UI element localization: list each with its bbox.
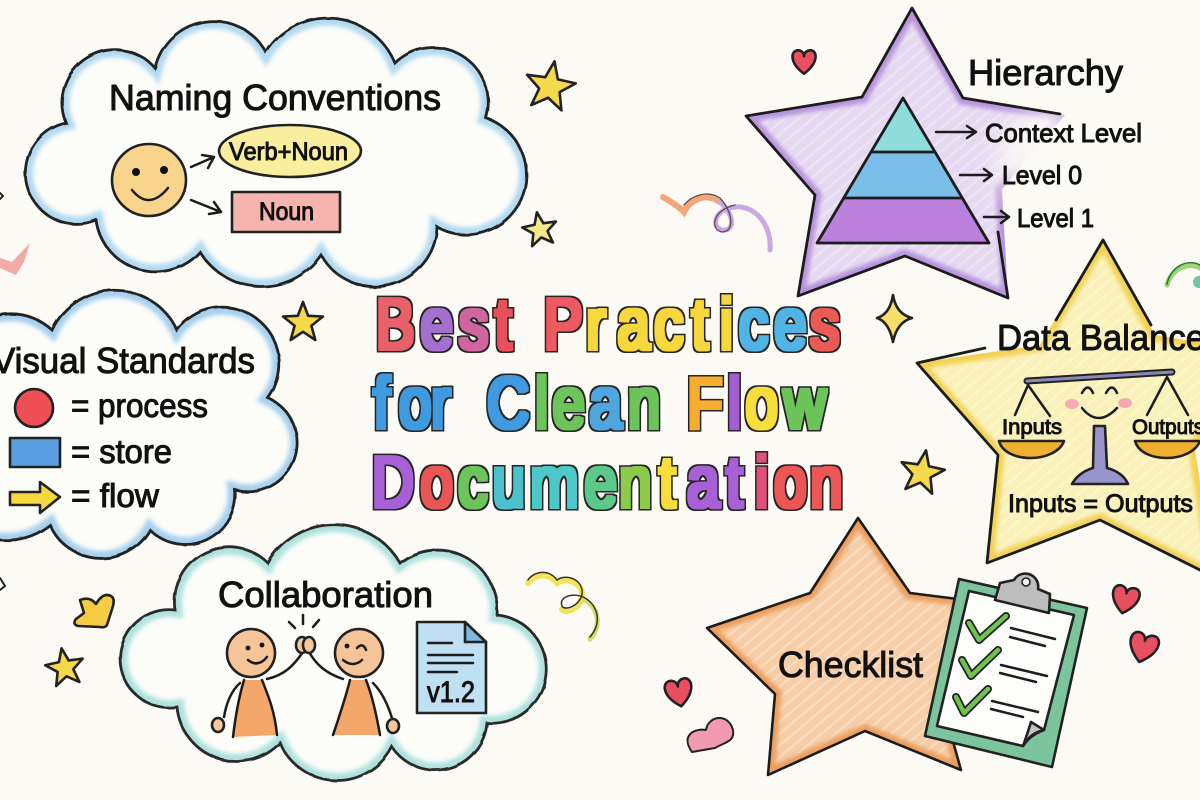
title: best practices for clean flow documentation: s <box>810 284 839 364</box>
title: best practices for clean flow documentation: n <box>810 442 842 522</box>
legend: process text: = process <box>71 387 208 424</box>
title: best practices for clean flow documentation: l <box>728 363 741 443</box>
title: best practices for clean flow documentation: t <box>692 284 708 364</box>
title: best practices for clean flow documentation: t <box>659 442 675 522</box>
title: best practices for clean flow documentation: B <box>376 284 414 364</box>
title: best practices for clean flow documentation: n <box>619 442 651 522</box>
icon: high five hands <box>289 615 319 653</box>
noun rectangle label <box>232 192 340 232</box>
title: best practices for clean flow documentation: n <box>628 363 660 443</box>
label: context level: Context Level <box>985 118 1142 148</box>
arrow to noun <box>191 200 221 214</box>
icon: smiley face <box>112 144 186 216</box>
heading: hierarchy: Hierarchy <box>968 52 1123 93</box>
pyramid chart <box>817 98 989 243</box>
decoration: squiggles <box>0 193 1200 639</box>
panel: naming conventions cloud <box>25 18 526 287</box>
heading: naming conventions: Naming Conventions <box>109 77 441 118</box>
title: best practices for clean flow documentation: e <box>585 442 617 522</box>
title: best practices for clean flow documentation: o <box>746 363 778 443</box>
title: best practices for clean flow documentation: l <box>535 363 548 443</box>
icon: document v1.2: v1.2 <box>427 676 475 709</box>
icon: clipboard with checks <box>925 574 1087 767</box>
title: best practices for clean flow documentation: C <box>487 363 529 443</box>
title: best practices for clean flow documentation: c <box>654 284 683 364</box>
title: best practices for clean flow documentation: r <box>431 363 450 443</box>
heading: visual standards: Visual Standards <box>0 340 255 381</box>
title: best practices for clean flow documentation: o <box>774 442 806 522</box>
title: best practices for clean flow documentation: r <box>586 284 606 364</box>
title: best practices for clean flow documentation: e <box>774 284 806 364</box>
panel: data balance star <box>917 240 1200 578</box>
verb+noun ellipse label: Verb+Noun <box>229 138 348 166</box>
legend: process circle <box>15 389 53 427</box>
arrow: level 1 <box>984 211 1009 223</box>
title: best practices for clean flow documentation: u <box>493 442 525 522</box>
title: best practices for clean flow documentation <box>372 284 842 522</box>
title: best practices for clean flow documentation: m <box>530 442 578 522</box>
title: best practices for clean flow documentation: t <box>726 442 742 522</box>
legend: store rectangle <box>10 438 60 467</box>
title: best practices for clean flow documentation: o <box>399 363 431 443</box>
title: best practices for clean flow documentation: i <box>755 442 768 522</box>
title: best practices for clean flow documentation: c <box>739 284 768 364</box>
legend: flow arrow <box>10 482 60 513</box>
title: best practices for clean flow documentation: i <box>720 284 733 364</box>
panel: checklist star <box>707 518 1087 775</box>
legend: store text: = store <box>71 433 172 470</box>
verb+noun ellipse label <box>219 125 361 177</box>
title: best practices for clean flow documentation: t <box>495 284 511 364</box>
arrow to verb+noun <box>191 155 214 168</box>
title: best practices for clean flow documentation: e <box>421 284 453 364</box>
title: best practices for clean flow documentation: F <box>687 363 722 443</box>
title: best practices for clean flow documentation: e <box>553 363 585 443</box>
arrow: context level <box>936 126 976 138</box>
noun rectangle label: Noun <box>259 198 314 226</box>
title: best practices for clean flow documentation: a <box>687 442 720 522</box>
title: best practices for clean flow documentation: D <box>372 442 414 522</box>
panel: collaboration cloud <box>120 525 546 780</box>
arrow: level 0 <box>960 169 992 181</box>
title: best practices for clean flow documentation: c <box>458 442 487 522</box>
panel: hierarchy star <box>746 8 1142 298</box>
illustration: second person <box>309 629 399 735</box>
illustration: balance scale <box>999 372 1200 484</box>
label: inputs: Inputs <box>1002 416 1062 439</box>
panel: visual standards cloud <box>0 290 297 558</box>
icon: document v1.2 <box>417 622 486 713</box>
title: best practices for clean flow documentation: a <box>590 363 622 443</box>
title: best practices for clean flow documentation: a <box>618 284 650 364</box>
title: best practices for clean flow documentation: P <box>544 284 582 364</box>
legend: flow text: = flow <box>71 477 159 514</box>
illustration: first person <box>212 629 303 737</box>
decoration: stars <box>43 57 948 687</box>
title: best practices for clean flow documentation: o <box>421 442 453 522</box>
heading: checklist: Checklist <box>778 644 923 685</box>
title: best practices for clean flow documentation: f <box>374 363 390 443</box>
label: level 0: Level 0 <box>1002 160 1082 190</box>
label: inputs = outputs: Inputs = Outputs <box>1008 490 1193 518</box>
title: best practices for clean flow documentation: s <box>459 284 488 364</box>
title: best practices for clean flow documentation: w <box>783 363 826 443</box>
heading: collaboration: Collaboration <box>218 574 433 615</box>
label: level 1: Level 1 <box>1017 203 1094 233</box>
